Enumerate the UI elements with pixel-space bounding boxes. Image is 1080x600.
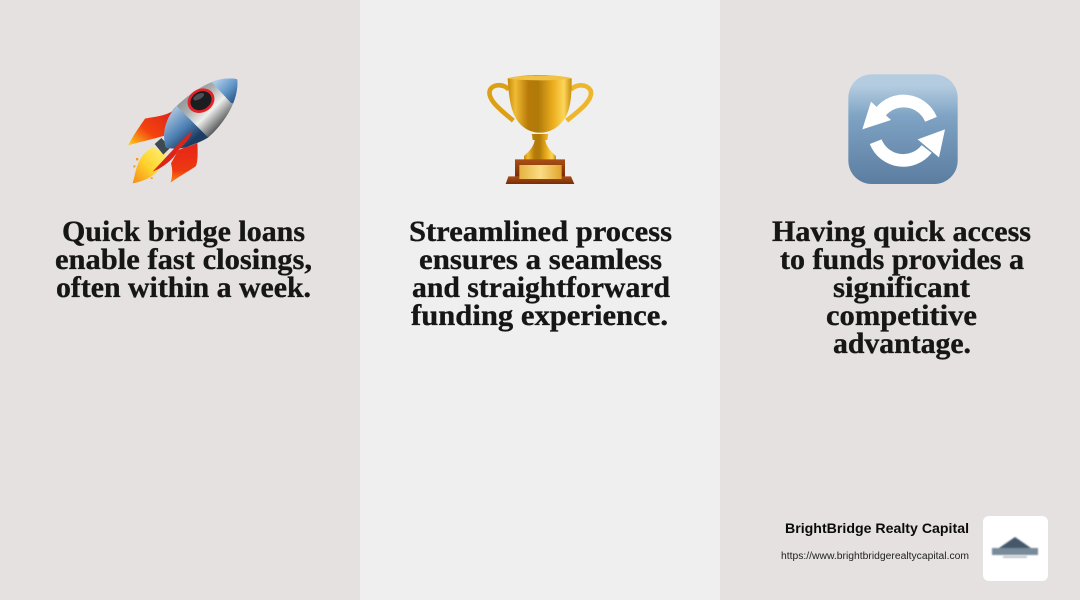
heading: fast closings: often within a week. [56,271,311,304]
icon: trophy [489,75,591,184]
heading: fast closings: Quick bridge loans [62,215,305,248]
heading: competitive advantage: competitive [826,299,977,332]
icon: rocket [128,78,238,184]
panel: streamlined process [360,0,720,600]
heading: streamlined process: Streamlined process [409,215,672,248]
company name: BrightBridge Realty Capital [785,520,969,536]
heading: streamlined process: ensures a seamless [419,243,662,276]
panel: competitive advantage [720,0,1080,600]
heading: streamlined process: funding experience. [411,299,668,332]
logo tile [983,516,1048,581]
heading: streamlined process: and straightforward [412,271,670,304]
heading: fast closings: enable fast closings, [55,243,312,276]
panel: fast closings [56,78,311,298]
heading: competitive advantage: significant [833,271,970,304]
icon: refresh arrows [848,74,958,184]
brand footer [781,516,1048,581]
website url: https://www.brightbridgerealtycapital.com [781,551,969,562]
heading: competitive advantage: to funds provides a [780,243,1024,276]
heading: competitive advantage: Having quick access [772,215,1031,248]
heading: competitive advantage: advantage. [833,327,971,360]
